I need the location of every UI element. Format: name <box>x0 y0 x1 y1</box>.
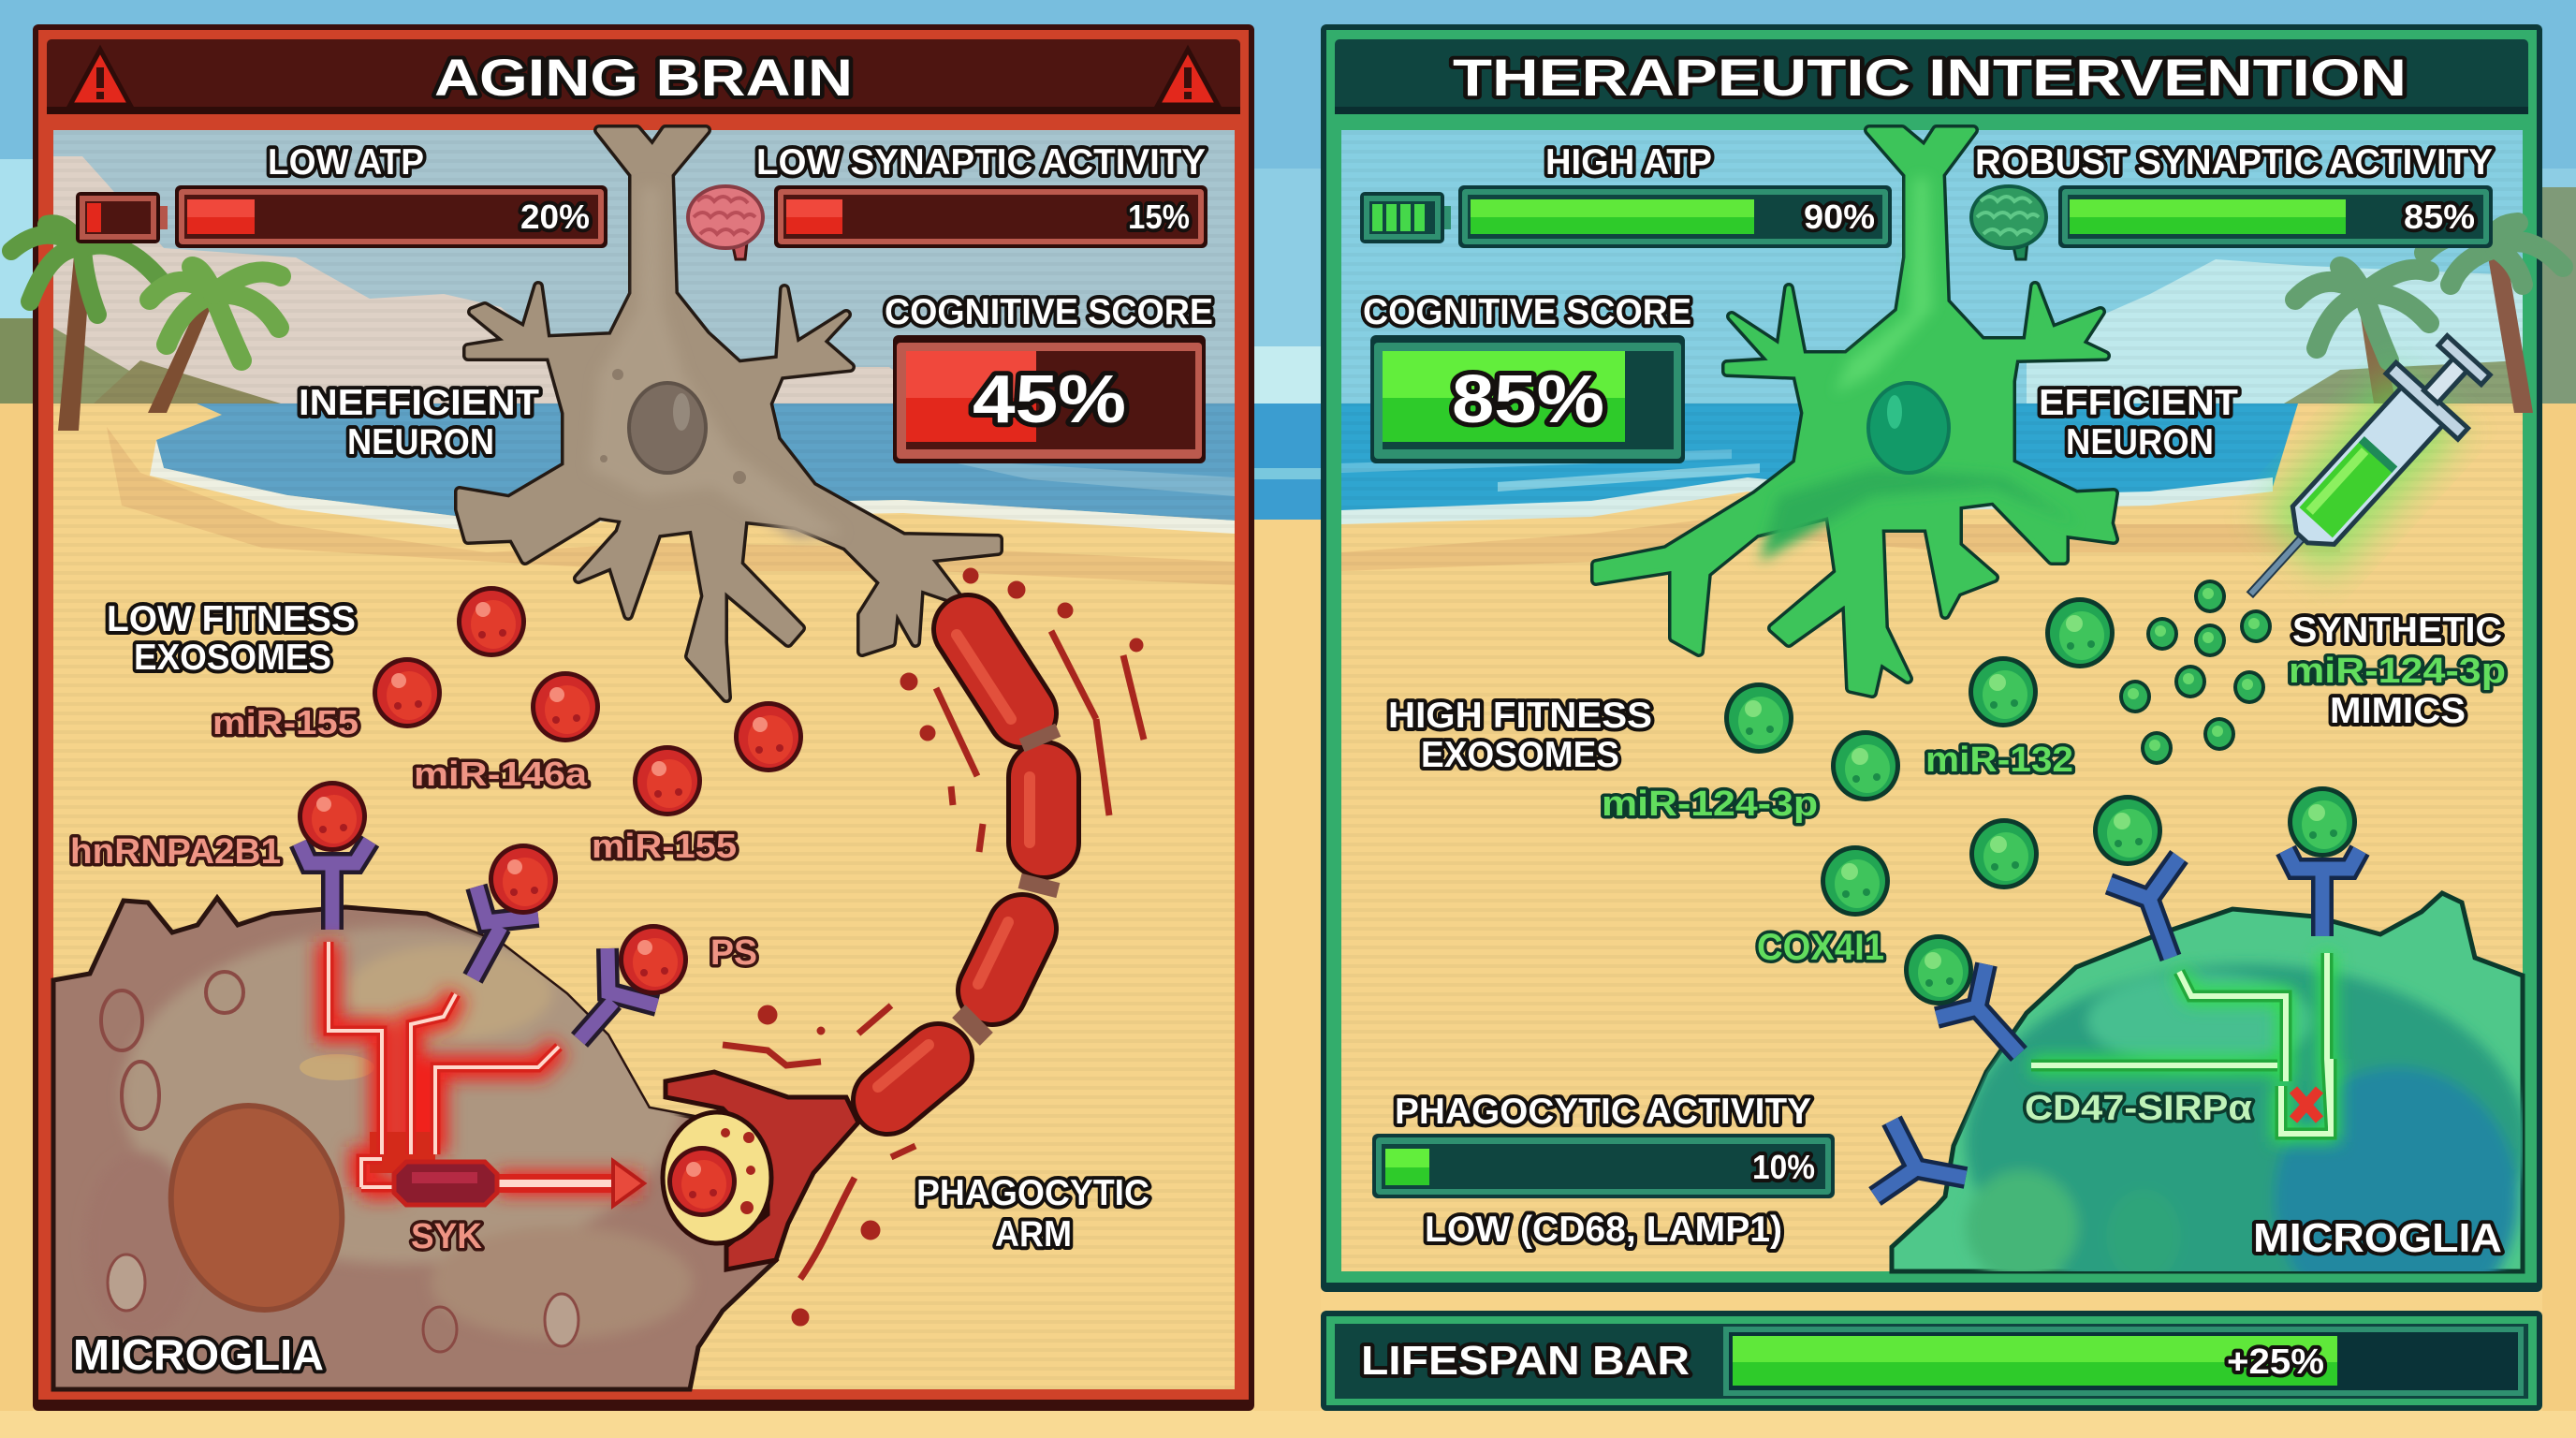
icon: pink brain <box>688 186 763 259</box>
panel: therapeutic intervention <box>1321 24 2563 1329</box>
SYK kinase box <box>394 1162 497 1205</box>
stat: low synaptic activity <box>688 142 1208 259</box>
label: high fitness exosomes: HIGH FITNESS <box>1388 696 1652 736</box>
title: AGING BRAIN <box>434 48 853 107</box>
right palm trees <box>2295 223 2563 413</box>
icon: battery low <box>76 192 168 243</box>
label: efficient neuron <box>2039 383 2238 462</box>
label: synthetic mimics: SYNTHETIC <box>2292 610 2502 651</box>
cognitive score: 45% <box>885 292 1213 463</box>
label: miR-155: miR-155 <box>212 703 359 741</box>
header bar <box>1335 39 2528 114</box>
label: phagocytic arm <box>916 1173 1149 1255</box>
cognitive score: 85%: COGNITIVE SCORE <box>1363 292 1691 332</box>
label: phagocytic arm: PHAGOCYTIC <box>916 1173 1149 1213</box>
label: synthetic mimics <box>2289 610 2506 731</box>
stat: phagocytic activity <box>1372 1092 1835 1250</box>
cognitive score: 45%: COGNITIVE SCORE <box>885 292 1213 332</box>
left scene backdrop <box>53 130 1235 1389</box>
icon: warning triangle left <box>70 50 130 105</box>
cognitive score: 85%: 85% <box>1452 362 1604 437</box>
bar: synaptic 85% <box>2058 185 2493 248</box>
stat: high ATP: HIGH ATP <box>1545 142 1712 183</box>
stat: low synaptic activity: LOW SYNAPTIC ACTIVITY <box>756 142 1206 183</box>
cognitive score: 45%: 45% <box>973 362 1126 437</box>
label: low fitness exosomes: LOW FITNESS <box>107 599 356 639</box>
label: inefficient neuron: NEURON <box>347 422 494 462</box>
signalling cascade: SYK <box>329 942 644 1206</box>
label: lifespan bar: LIFESPAN BAR <box>1361 1338 1690 1384</box>
receptor: open lower <box>1875 1121 1966 1196</box>
label: miR-132: miR-132 <box>1925 741 2073 780</box>
panel: lifespan bar <box>1321 1311 2542 1411</box>
stat: phagocytic activity: PHAGOCYTIC ACTIVITY <box>1395 1092 1811 1132</box>
label: efficient neuron: EFFICIENT <box>2039 383 2238 423</box>
synthetic mimic particles <box>2119 580 2272 765</box>
label: inefficient neuron <box>299 383 539 462</box>
microglia: healthy <box>1889 890 2525 1273</box>
label: high fitness exosomes <box>1388 696 1652 775</box>
label: COX4I1: COX4I1 <box>1757 927 1884 968</box>
left palm trees <box>11 224 281 431</box>
receptor: open <box>2109 857 2179 958</box>
label: SYK: SYK <box>411 1217 483 1256</box>
bar: synaptic 15%: 15% <box>1128 198 1190 236</box>
icon: battery full <box>1360 192 1451 243</box>
stat: phagocytic activity: LOW (CD68, LAMP1) <box>1425 1210 1782 1250</box>
bar: ATP 90% <box>1458 185 1892 248</box>
label: microglia: MICROGLIA <box>2253 1215 2502 1261</box>
cognitive score: 85% <box>1363 292 1691 463</box>
icon: green brain <box>1971 186 2046 259</box>
receptor with exosome <box>1904 934 2019 1054</box>
label: miR-155 second: miR-155 <box>592 827 737 865</box>
header bar <box>47 39 1240 114</box>
bar: synaptic 85%: 85% <box>2404 198 2475 236</box>
title: THERAPEUTIC INTERVENTION <box>1453 48 2407 107</box>
receptor with exosome <box>579 924 688 1040</box>
icon: red X block <box>2293 1090 2320 1120</box>
neuron: efficient <box>1596 130 2114 693</box>
label: inefficient neuron: INEFFICIENT <box>299 383 539 423</box>
label: low fitness exosomes <box>107 599 356 678</box>
label: low fitness exosomes: EXOSOMES <box>134 638 331 678</box>
bar: lifespan +25% <box>1723 1327 2524 1396</box>
label: high fitness exosomes: EXOSOMES <box>1421 735 1619 775</box>
label: synthetic mimics: miR-124-3p <box>2289 652 2506 691</box>
stat: high ATP <box>1360 142 1892 248</box>
stat: robust synaptic activity <box>1971 142 2493 259</box>
microglia nucleus <box>168 1103 344 1313</box>
label: microglia: MICROGLIA <box>73 1330 324 1379</box>
phagosome <box>663 1112 771 1243</box>
stat: robust synaptic activity: ROBUST SYNAPTIC ACTIVITY <box>1975 142 2493 183</box>
phagocytic arm engulfing exosome <box>663 1072 858 1269</box>
bar: lifespan +25%: +25% <box>2227 1343 2324 1382</box>
exosomes: low fitness <box>373 586 803 816</box>
label: synthetic mimics: MIMICS <box>2330 691 2466 731</box>
neuron: inefficient <box>460 130 998 697</box>
microglia: aging <box>53 898 776 1389</box>
signalling cascade: CD47-SIRPa blocked <box>2031 953 2331 1134</box>
receptor with exosome <box>473 844 558 978</box>
axon: degrading red segments <box>878 629 1044 1100</box>
receptor with exosome <box>298 781 370 930</box>
stat: low ATP: LOW ATP <box>268 142 424 183</box>
receptor with exosome <box>2286 786 2360 936</box>
label: miR-124-3p: miR-124-3p <box>1602 785 1818 824</box>
debris and damage streaks <box>723 568 1144 1326</box>
label: CD47-SIRPa: CD47-SIRPα <box>2025 1089 2252 1128</box>
label: efficient neuron: NEURON <box>2066 422 2214 462</box>
exosomes: high fitness <box>1724 597 2162 917</box>
bar: ATP 20% <box>175 185 607 248</box>
stat: phagocytic activity: 10% <box>1752 1148 1815 1186</box>
right scene backdrop <box>1341 130 2523 1271</box>
syringe with mimics <box>2215 322 2505 627</box>
bar: synaptic 15% <box>774 185 1208 248</box>
label: phagocytic arm: ARM <box>995 1214 1072 1255</box>
label: PS: PS <box>710 933 757 973</box>
panel: aging brain <box>11 24 1254 1411</box>
label: hnRNPA2B1: hnRNPA2B1 <box>70 832 281 872</box>
stat: low ATP <box>76 142 607 248</box>
arrow to phagosome <box>497 1161 644 1206</box>
icon: warning triangle right <box>1158 50 1218 105</box>
bar: ATP 90%: 90% <box>1804 198 1875 236</box>
bar: ATP 20%: 20% <box>520 198 590 236</box>
label: miR-146a: miR-146a <box>414 755 588 793</box>
